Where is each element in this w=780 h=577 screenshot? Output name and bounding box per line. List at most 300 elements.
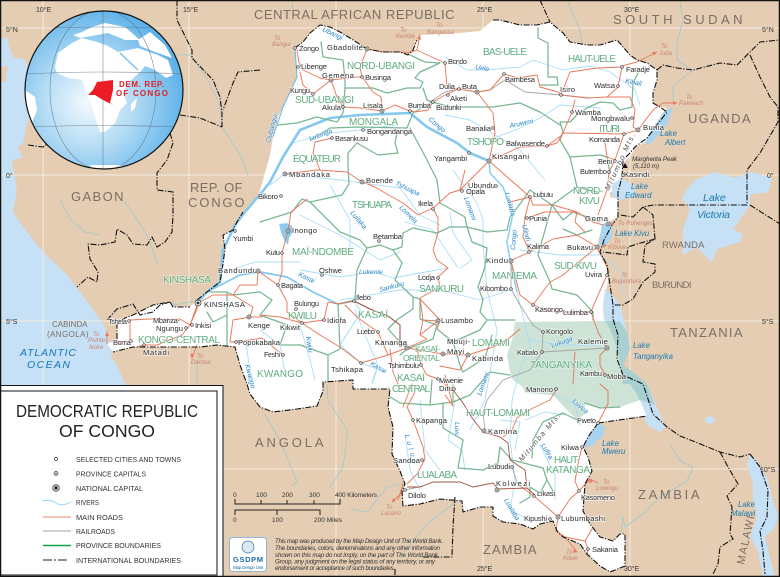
province labels <box>138 47 620 481</box>
city labels: Inkisi <box>195 321 211 330</box>
province labels: SUD-UBANGI <box>295 95 354 106</box>
GSDPM logo: Map Design Unit <box>233 565 264 570</box>
city labels: Watsa <box>594 81 616 90</box>
country labels: RWANDA <box>662 240 705 251</box>
legend title <box>16 401 198 441</box>
province labels: KINSHASA <box>163 275 211 286</box>
country labels: MALAWI <box>735 514 757 566</box>
cross-border road destinations: To <box>436 23 443 29</box>
legend items: NATIONAL CAPITAL <box>76 484 143 493</box>
country labels: (ANGOLA) <box>47 330 89 339</box>
city labels: Lisala <box>363 101 384 110</box>
graticule labels: 5°S <box>6 318 18 326</box>
lake labels: Malawi <box>731 509 756 518</box>
cross-border road destinations: Kibuye <box>608 245 627 251</box>
legend title: DEMOCRATIC REPUBLIC <box>16 401 198 421</box>
city labels: Feshi <box>264 350 280 359</box>
river labels: Kasai <box>369 361 388 375</box>
river labels: Oubangui <box>265 113 280 144</box>
cross-border road destinations: Damba <box>191 360 211 366</box>
city labels: Likasi <box>537 489 555 498</box>
river labels: Aruwimi <box>508 118 535 130</box>
city labels: Tshimbulu <box>388 361 419 370</box>
city labels: Ubundu <box>468 181 495 190</box>
road arrowheads <box>105 35 677 553</box>
river labels: Uele <box>475 64 490 73</box>
province labels: LUALABA <box>417 470 457 481</box>
legend items: INTERNATIONAL BOUNDARIES <box>76 556 181 565</box>
legend title: OF CONGO <box>59 421 155 441</box>
city labels: Lubutu <box>533 190 553 199</box>
city labels: Sandoa <box>393 456 421 465</box>
legend items: RAILROADS <box>76 527 115 536</box>
province labels: KASAÏ <box>358 309 388 321</box>
legend symbols <box>43 458 71 560</box>
scale bar: 100 <box>272 517 283 524</box>
Red Sea <box>120 53 138 70</box>
city labels: Bambesa <box>505 75 536 84</box>
province labels: HAUT- <box>554 455 580 466</box>
graticule labels: 25°E <box>477 565 493 573</box>
city labels: Libenge <box>301 62 327 71</box>
lake labels: Victoria <box>697 209 730 221</box>
disclaimer text: The boundaries, colors, denominations and any other information <box>275 545 441 552</box>
province labels: TSHOPO <box>467 137 504 148</box>
city labels: KINSHASA <box>204 300 246 309</box>
GSDPM logo <box>230 538 266 572</box>
country labels: ANGOLA <box>255 435 324 450</box>
city labels: Kasomeno <box>581 493 615 502</box>
province labels: KWILU <box>288 311 317 322</box>
river labels: Lomela <box>398 204 418 225</box>
cross-border road destinations: Kitwe <box>563 556 578 562</box>
DRC highlight <box>88 80 113 105</box>
locator globe <box>22 10 183 172</box>
globe label: DEM. REP. <box>119 80 164 89</box>
main roads <box>107 35 677 556</box>
lake: Kivu <box>599 222 612 246</box>
city labels: Ikela <box>418 199 434 208</box>
city labels: Kindu <box>486 256 508 265</box>
legend items: RIVERS <box>76 498 99 507</box>
country labels: ZAMBIA <box>638 487 700 502</box>
cross-border road destinations: Luwingu <box>596 486 619 492</box>
city labels: Isiro <box>560 85 575 94</box>
disclaimer text: endorsement or acceptance of such boundaries. <box>275 565 395 572</box>
lake: Edward <box>612 178 635 200</box>
cross-border road destinations: To <box>274 36 281 42</box>
Congo land <box>107 20 667 572</box>
cross-border road destinations: Bujumbura <box>612 279 642 285</box>
river labels: Ubangi <box>321 26 344 42</box>
cross-border road destinations: To <box>661 44 668 50</box>
river labels: Kwilu <box>304 336 314 354</box>
Margherita Peak marker: Margherita Peak <box>632 156 678 163</box>
city labels: Kalemie <box>578 337 608 346</box>
GSDPM logo: GSDPM <box>233 555 263 564</box>
graticule labels: 0° <box>767 172 774 180</box>
island: Bioko <box>0 65 8 82</box>
Margherita Peak marker: (5,110 m) <box>633 163 659 170</box>
cross-border road destinations: To <box>614 239 621 245</box>
city labels: Pweto <box>577 416 596 425</box>
lake labels: Lake <box>703 192 726 204</box>
legend items <box>76 455 181 565</box>
river labels: Congo <box>510 229 519 250</box>
foreign rivers <box>60 2 693 557</box>
city labels: Kipushi <box>524 514 547 523</box>
province labels: HAUT-LOMAMI <box>466 408 530 419</box>
cross-border road destinations: To Ruhengeri <box>618 221 654 227</box>
city labels: Kasongo <box>535 305 563 314</box>
country labels: ZAMBIA <box>483 542 537 557</box>
city labels: Goma <box>585 214 609 223</box>
country labels: UGANDA <box>688 111 751 126</box>
province boundaries <box>207 28 638 503</box>
lake: Rukwa <box>705 416 715 424</box>
lake: Malawi <box>747 454 778 577</box>
river labels: Lukuga <box>550 336 574 350</box>
river labels: Luvu <box>453 422 460 437</box>
city labels: Kapanga <box>416 416 448 425</box>
scale bar: 200 <box>282 492 293 499</box>
railroads <box>405 80 607 490</box>
province labels: MANIEMA <box>492 271 537 282</box>
city labels: Budunki <box>436 103 461 112</box>
city labels: Boma <box>113 338 132 347</box>
city labels: Kasindi <box>624 170 649 179</box>
city labels: Bagata <box>281 281 304 290</box>
globe landmasses <box>22 23 173 172</box>
globe grid <box>25 10 183 170</box>
mountain range labels <box>517 132 637 463</box>
globe label: OF CONGO <box>116 89 168 98</box>
graticule labels: 5°N <box>762 26 774 34</box>
river labels: Kasai <box>297 271 316 285</box>
cross-border road destinations: To <box>400 28 407 34</box>
province labels: HAUT-UELE <box>568 54 616 65</box>
lake labels: Albert <box>664 138 686 147</box>
cross-border road destinations: Pakwach <box>679 101 704 107</box>
city labels: Wamba <box>575 108 602 117</box>
lake labels: Lake <box>738 500 756 509</box>
city labels: Sakania <box>592 545 619 554</box>
city labels: Tshela <box>108 317 128 326</box>
road over rail: Dilolo to Kolwezi <box>407 482 535 495</box>
legend panel <box>0 386 223 577</box>
graticule labels: 10°E <box>36 6 52 14</box>
city labels: Kananga <box>375 338 408 347</box>
city labels: Lubumbashi <box>561 514 605 523</box>
city labels: Bondo <box>448 57 467 66</box>
lake labels: Mweru <box>602 447 626 456</box>
city labels: Bukavu <box>567 243 593 252</box>
city labels: Lusambo <box>441 316 473 325</box>
city labels: Aketi <box>450 94 467 103</box>
city labels: Kilwa <box>561 443 580 452</box>
country labels: CENTRAL AFRICAN REPUBLIC <box>254 7 455 22</box>
cross-border road destinations: To <box>603 480 610 486</box>
graticule labels: 30°E <box>624 565 640 573</box>
province labels: KASAÏ <box>397 372 425 384</box>
ocean label <box>19 347 76 371</box>
cross-border road destinations: To <box>386 505 393 511</box>
city labels: Mongbwalu <box>591 114 630 123</box>
disclaimer text: Group, any judgment on the legal status of any territory, or any <box>275 558 436 566</box>
city labels: Basankusu <box>335 134 368 143</box>
lake: Victoria <box>682 172 772 262</box>
ocean label: ATLANTIC <box>19 347 76 359</box>
city labels: Mbanza- <box>153 316 180 325</box>
city labels: Mwenie <box>439 376 463 385</box>
river labels: Sankuru <box>379 281 405 294</box>
province labels: KATANGA <box>546 465 590 476</box>
city labels: Lodja <box>418 273 436 282</box>
legend items: SELECTED CITIES AND TOWNS <box>76 455 181 464</box>
river labels: Tshuapa <box>394 180 421 198</box>
city labels: Lubudi <box>488 462 510 471</box>
mountain range labels: Mitumba Mts. <box>517 412 562 463</box>
cross-border road destinations: Juba <box>658 51 673 57</box>
legend items: PROVINCE CAPITALS <box>76 470 146 478</box>
scale bar: 200 Miles <box>314 517 343 524</box>
province labels: ÉQUATEUR <box>293 152 341 165</box>
river labels: Lomami <box>476 371 491 397</box>
city labels: Faradje <box>626 65 650 74</box>
country labels: GABON <box>71 189 124 204</box>
city labels: Lulimba <box>563 308 589 317</box>
disclaimer text <box>275 538 443 572</box>
city labels: Kutu <box>266 248 280 257</box>
disclaimer text: shown on this map do not imply, on the part of The World Bank <box>275 552 439 559</box>
city labels: Boende <box>366 176 393 185</box>
scale bar: 0 <box>233 517 237 524</box>
country labels: CABINDA <box>52 320 88 329</box>
city labels: Kongolo <box>546 327 573 336</box>
lake labels: Lake Kivu <box>615 229 650 238</box>
road over rail: Ditu to Kolwezi <box>453 390 527 487</box>
rivers <box>230 57 640 520</box>
province labels: KWANGO <box>257 369 303 380</box>
city labels: Kolwezi <box>496 479 530 488</box>
disclaimer text: This map was produced by the Map Design Unit of The World Bank. <box>275 538 443 545</box>
Congo and Kasai main rivers <box>197 48 517 384</box>
city labels: Opala <box>466 187 486 196</box>
river labels: Lukenie <box>359 269 383 276</box>
city labels: Yumbi <box>233 234 253 243</box>
graticule labels: 5°N <box>6 26 18 34</box>
province labels: SUD-KIVU <box>554 261 597 272</box>
city labels: Kalima <box>527 242 550 251</box>
graticule labels: 5°S <box>762 318 774 326</box>
graticule labels: 25°E <box>477 6 493 14</box>
scale bar: 100 <box>256 492 267 499</box>
lake labels: Tanganyika <box>633 352 674 361</box>
city labels: Punia <box>529 214 548 223</box>
scale bar <box>233 492 378 524</box>
cross-border road destinations <box>88 23 704 562</box>
river labels: Kwango <box>243 364 256 389</box>
river labels: Luvua <box>571 398 590 416</box>
city labels: Ditu <box>439 384 453 393</box>
scale bar: 0 <box>233 492 237 499</box>
city labels: Bandundu <box>218 266 257 275</box>
cross-border road destinations: To <box>93 332 100 338</box>
ocean <box>0 37 127 392</box>
river labels: Kibali <box>625 78 643 88</box>
city labels: Bafwasende <box>506 139 545 148</box>
lake labels <box>602 129 756 518</box>
mountain range labels: Mitumbo Mts. <box>603 132 637 192</box>
city labels: Ngungu <box>156 324 183 333</box>
city labels: Kungu <box>290 86 310 95</box>
river labels: Lomami <box>462 196 477 222</box>
lake: Albert <box>645 107 673 145</box>
city labels: Matadi <box>143 348 169 357</box>
province labels: KASAÏ- <box>415 344 440 354</box>
city labels: Kisangani <box>492 152 529 161</box>
graticule labels: 30°E <box>624 6 640 14</box>
river labels: Lulua <box>403 434 418 465</box>
globe label <box>116 80 168 98</box>
city labels: Dulia <box>439 82 456 91</box>
city labels: Gemena <box>322 71 355 80</box>
province labels: LOMAMI <box>472 338 510 349</box>
legend items: MAIN ROADS <box>76 513 123 522</box>
lake labels: Edward <box>625 191 652 200</box>
city labels: Businga <box>365 73 392 82</box>
cross-border road destinations: Pointe- <box>88 338 107 344</box>
city labels: Akula <box>322 103 342 112</box>
city markers <box>128 47 640 550</box>
province labels: MONGALA <box>349 117 398 128</box>
lake: Mweru <box>583 423 605 447</box>
province labels: ORIENTAL <box>403 353 440 363</box>
city labels: Ilebo <box>356 293 371 302</box>
country labels: SOUTH SUDAN <box>613 12 743 27</box>
province labels: NORD- <box>573 186 603 197</box>
lake: Tanganyika <box>603 289 665 432</box>
ocean label: OCEAN <box>27 359 70 371</box>
city labels: Bunia <box>643 123 665 132</box>
city labels: Kikwit <box>280 323 301 332</box>
city labels: Buta <box>462 82 478 91</box>
country labels: BURUNDI <box>652 280 692 291</box>
cross-border road destinations: To <box>686 95 693 101</box>
province labels: BAS-UELE <box>483 47 527 58</box>
cross-border road destinations: Kembe <box>396 34 416 40</box>
road over rail: Ilebo to Kananga <box>354 301 407 348</box>
city labels: Zongo <box>299 44 319 53</box>
river labels: Lualaba <box>503 192 516 217</box>
lake labels: Lake <box>631 182 649 191</box>
Margherita Peak marker <box>622 156 678 170</box>
province labels: ITURI <box>599 124 620 135</box>
city labels: Beni <box>598 157 612 166</box>
cross-border road destinations: To <box>566 550 573 556</box>
province labels: KIVU <box>579 196 600 207</box>
city labels: Idiofa <box>327 316 347 325</box>
city labels: Mbandaka <box>289 170 331 179</box>
city labels: Moba <box>607 372 627 381</box>
river labels: Lufira <box>539 442 554 461</box>
province labels: SANKURU <box>419 284 464 295</box>
graticule labels: 10°S <box>760 466 776 474</box>
cross-border road destinations: To <box>621 273 628 279</box>
city labels: Dilolo <box>408 491 426 500</box>
river labels: Congo <box>427 116 447 135</box>
city labels: Yangambi <box>434 154 467 163</box>
river labels: Lulonga <box>308 128 334 143</box>
river labels: Lualaba <box>502 498 521 522</box>
city labels: Luebo <box>357 327 375 336</box>
river labels <box>243 26 643 522</box>
lake labels: Lake <box>633 341 651 350</box>
city labels <box>108 43 665 554</box>
city labels: Tshikapa <box>331 365 364 374</box>
city labels: Oshwe <box>319 266 342 275</box>
lake labels: Lake <box>602 439 620 448</box>
city labels: Bikoro <box>258 192 278 201</box>
city labels: Kamina <box>488 427 518 436</box>
river labels: Luilaka <box>348 210 368 231</box>
city labels: Uvira <box>585 270 603 279</box>
city labels: Popokabaka <box>238 338 281 347</box>
city labels: Manono <box>526 385 553 394</box>
river labels: Ulindi <box>520 224 531 242</box>
city labels: Kambu <box>580 369 602 378</box>
city labels: Gbadolite <box>327 43 363 52</box>
country labels: REP. OF <box>190 180 243 195</box>
city labels: Butembo <box>580 167 607 176</box>
country labels: TANZANIA <box>670 325 743 340</box>
country labels: CONGO <box>188 195 245 210</box>
scale bar: 400 Kilometers <box>335 492 378 499</box>
city labels: Kenge <box>248 321 270 330</box>
city labels: Kibombo <box>480 284 508 293</box>
cross-border road destinations: Lucano <box>381 511 401 517</box>
city labels: Kabinda <box>472 354 504 363</box>
city labels: Banalia <box>466 124 492 133</box>
province labels: TANGANYIKA <box>530 360 592 371</box>
cross-border road destinations: Noire <box>89 345 104 351</box>
province labels: MAÏ-NDOMBE <box>292 246 354 258</box>
city labels: Bulungu <box>294 299 319 308</box>
city labels: Mbuji- <box>447 337 470 346</box>
city labels: Bongandanga <box>367 127 413 136</box>
legend items: PROVINCE BOUNDARIES <box>76 541 161 550</box>
province labels: NORD-UBANGI <box>347 61 415 72</box>
lake labels: Lake <box>660 129 678 138</box>
city labels: Kabalo <box>517 348 538 357</box>
scale bar: 300 <box>309 492 320 499</box>
graticule labels: 0° <box>6 172 13 180</box>
lake: Mai-Ndombe <box>279 223 293 245</box>
graticule labels: 15°E <box>183 6 199 14</box>
cross-border road destinations: To <box>197 354 204 360</box>
city labels: Bumba <box>408 101 432 110</box>
province labels: KONGO-CENTRAL <box>138 335 220 346</box>
city labels: Komanda <box>589 135 621 144</box>
cross-border road destinations: Bangui <box>272 42 291 48</box>
cross-border road destinations: Bangassa <box>427 30 454 36</box>
city labels: Mayi <box>447 347 464 356</box>
Tanganyika province shading <box>507 321 655 420</box>
city labels: Inongo <box>292 226 317 235</box>
province labels: CENTRAL <box>392 384 430 395</box>
city labels: Betamba <box>373 232 403 241</box>
province labels: TSHUAPA <box>352 200 392 211</box>
